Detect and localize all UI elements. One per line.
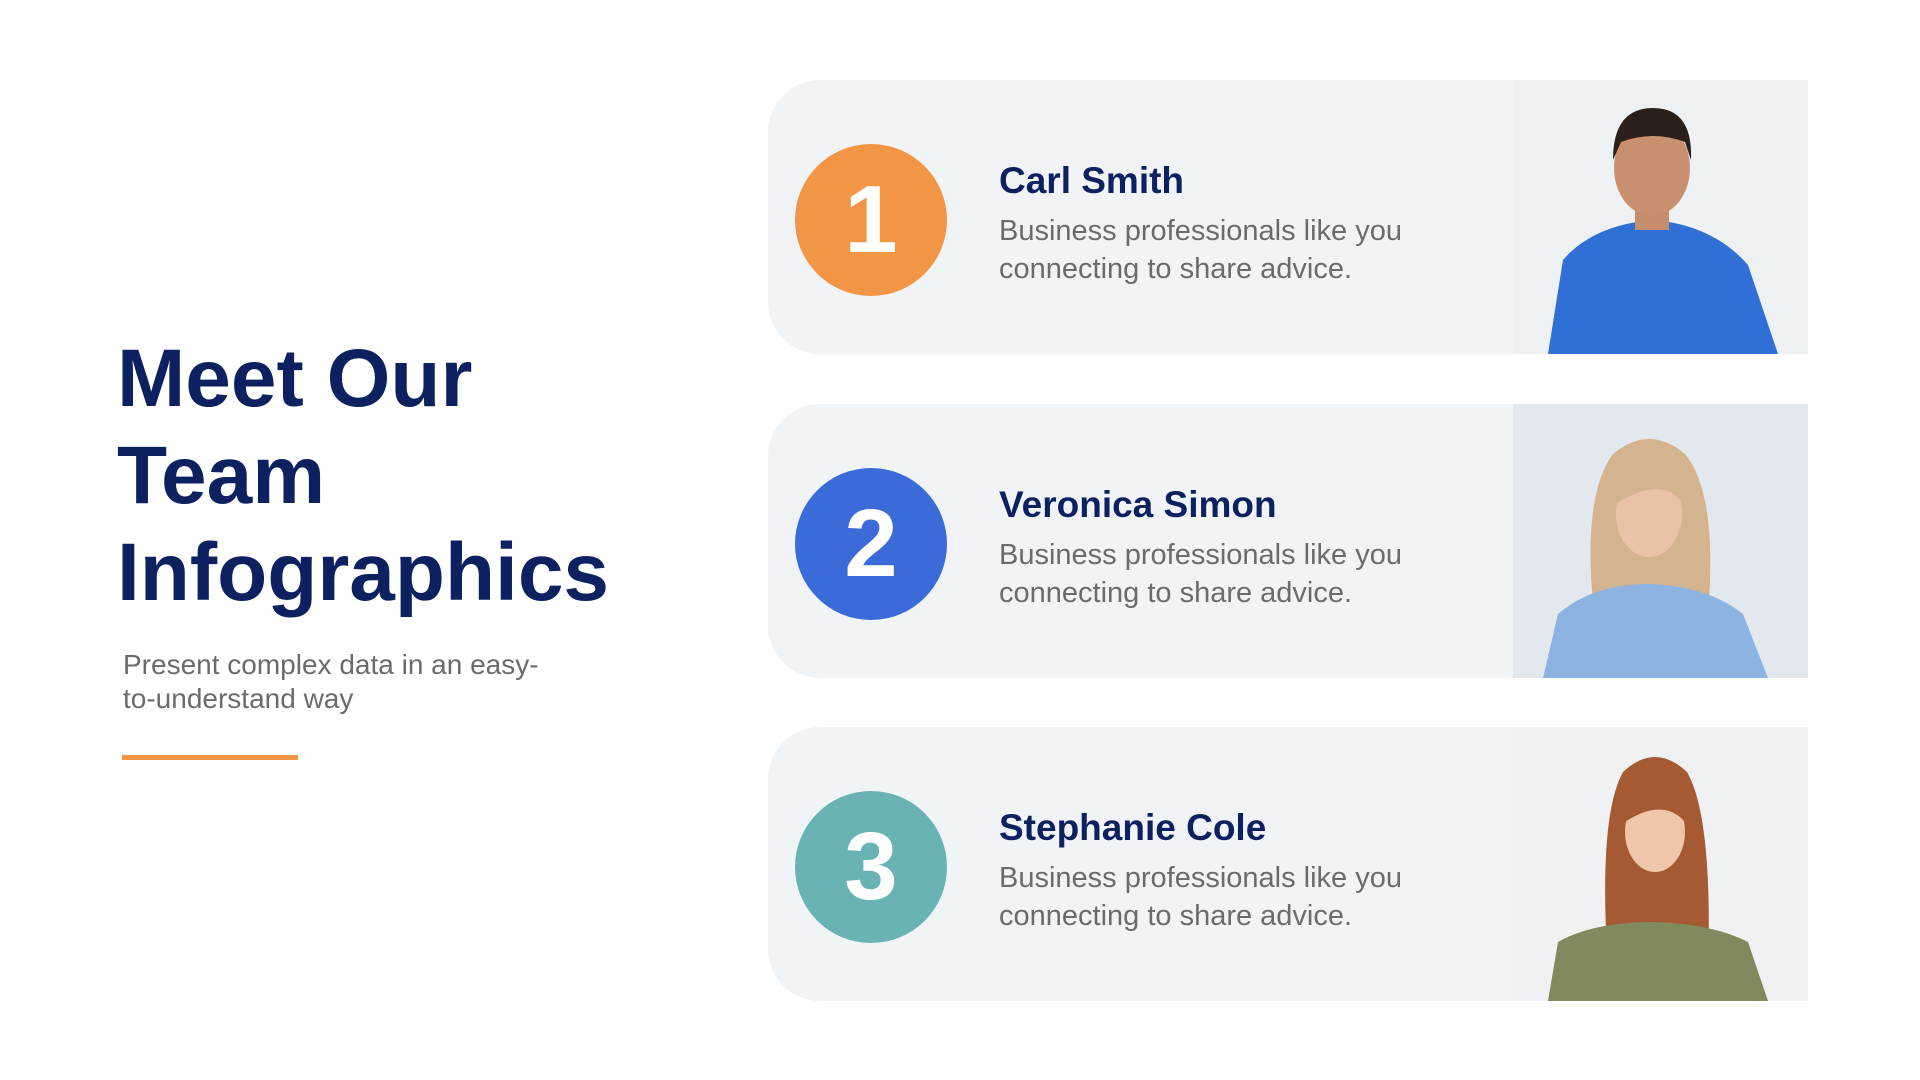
number circle 3 [795,791,947,943]
text: Veronica Simon: Veronica Simon [999,484,1277,525]
title: Team [117,430,325,521]
photo: Veronica Simon [1513,404,1808,678]
text: Carl Smith [999,160,1402,285]
number circle 3: 3 [844,813,898,920]
title [117,333,609,618]
number circle 2: 2 [844,490,898,597]
text: Stephanie Cole: Stephanie Cole [999,807,1266,848]
text: Veronica Simon [999,484,1402,609]
panel: member 2 [768,404,1808,678]
orange accent line [122,755,298,760]
text: Stephanie Cole: connecting to share advice. [999,900,1352,932]
text: Veronica Simon: Business professionals like you [999,539,1402,571]
title: Meet Our [117,333,472,424]
panel: member 1 [768,80,1808,354]
text: Stephanie Cole: Business professionals like you [999,862,1402,894]
text: Stephanie Cole [999,807,1402,932]
subtitle: to-understand way [123,683,353,714]
photo: Carl Smith [1548,108,1778,354]
number circle 2 [795,468,947,620]
title: Infographics [117,527,609,618]
text: Carl Smith: connecting to share advice. [999,253,1352,285]
number circle 1 [795,144,947,296]
text: Carl Smith: Business professionals like you [999,215,1402,247]
panel: member 3 [768,727,1808,1001]
subtitle: Present complex data in an easy- [123,649,539,680]
subtitle [123,649,539,714]
number circle 1: 1 [844,166,898,273]
text: Veronica Simon: connecting to share advice. [999,577,1352,609]
photo: Stephanie Cole [1548,757,1768,1001]
text: Carl Smith: Carl Smith [999,160,1184,201]
